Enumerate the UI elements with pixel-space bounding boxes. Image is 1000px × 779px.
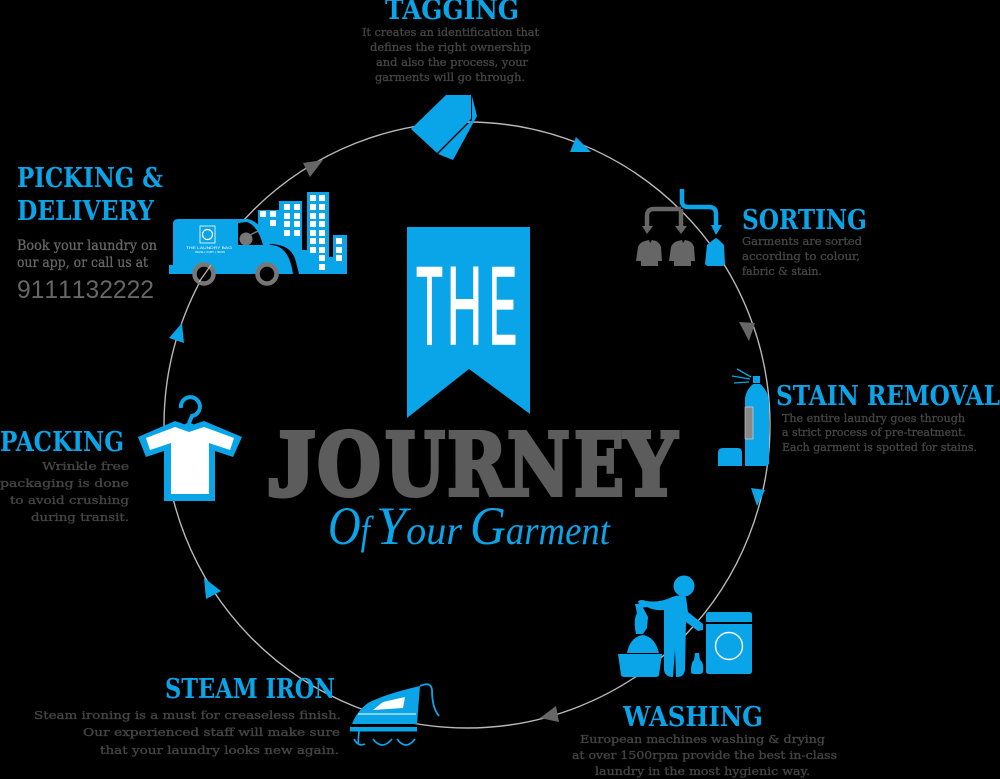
sorting text: fabric & stain. xyxy=(742,264,822,278)
title: JOURNEY: Y xyxy=(623,415,678,516)
title: JOURNEY: N xyxy=(507,415,570,516)
subtitle: Of Your Garment: Your xyxy=(376,496,462,556)
washing heading: WASHING xyxy=(622,702,763,733)
banner: THE xyxy=(407,227,530,418)
step: steam iron xyxy=(34,674,439,757)
washing text: at over 1500rpm provide the best in-class xyxy=(572,748,837,762)
title: JOURNEY: U xyxy=(385,415,445,516)
icon: person with laundry and washing machine xyxy=(618,576,752,677)
steam iron text: Our experienced staff will make sure xyxy=(83,725,340,739)
stain removal text: The entire laundry goes through xyxy=(782,411,966,425)
step: picking and delivery xyxy=(17,163,347,304)
subtitle: Of Your Garment: Of xyxy=(328,496,374,556)
sorting heading: SORTING xyxy=(742,205,867,236)
step: washing xyxy=(572,576,837,778)
picking and delivery heading: DELIVERY xyxy=(17,196,155,227)
stain removal text xyxy=(782,411,977,454)
title: JOURNEY: R xyxy=(447,415,507,516)
title: JOURNEY xyxy=(267,410,678,516)
washing text: European machines washing & drying xyxy=(580,732,826,746)
icon: city skyline xyxy=(258,192,347,274)
step: tagging xyxy=(362,0,539,160)
picking and delivery heading: PICKING & xyxy=(17,163,163,194)
arrows on the circle xyxy=(169,137,765,722)
tagging text: It creates an identification that xyxy=(362,25,539,39)
picking and delivery text xyxy=(17,238,157,271)
journey circle xyxy=(164,122,770,728)
icon: delivery van xyxy=(169,219,299,284)
van logo xyxy=(186,226,232,254)
packing text: Wrinkle free xyxy=(42,459,129,473)
steam iron text: that your laundry looks new again. xyxy=(100,743,339,757)
washing text xyxy=(572,732,837,778)
picking and delivery text: Book your laundry on xyxy=(17,238,157,254)
packing text: packaging is done xyxy=(0,476,129,490)
picking and delivery heading xyxy=(17,163,163,227)
tagging text: garments will go through. xyxy=(375,70,525,84)
phone number: 9111132222 xyxy=(17,276,154,304)
sorting text: Garments are sorted xyxy=(742,234,863,248)
subtitle: Of Your Garment: Garment xyxy=(470,496,611,556)
picking and delivery text: our app, or call us at xyxy=(17,255,148,271)
icon: sorting arrows and garments xyxy=(636,189,725,266)
banner: THE: H xyxy=(447,244,482,368)
stain removal text: Each garment is spotted for stains. xyxy=(782,440,977,454)
steam iron text: Steam ironing is a must for creaseless finish. xyxy=(34,708,341,722)
icon: spray bottle xyxy=(718,369,769,466)
subtitle: Of Your Garment xyxy=(328,496,611,556)
packing text: during transit. xyxy=(31,510,129,524)
icon: tag xyxy=(411,95,477,160)
packing text: to avoid crushing xyxy=(10,493,130,507)
title: JOURNEY: J xyxy=(267,410,315,516)
sorting text xyxy=(742,234,863,278)
banner: THE: E xyxy=(489,244,517,368)
tagging text: defines the right ownership xyxy=(370,40,531,54)
packing heading: PACKING xyxy=(0,427,124,458)
step: packing xyxy=(0,397,242,524)
title: JOURNEY: O xyxy=(317,415,381,516)
sorting text: according to colour, xyxy=(742,249,860,263)
step: sorting xyxy=(636,189,867,278)
icon: shirt on hanger xyxy=(138,397,242,501)
van logo: WASH | DRY | IRON xyxy=(195,250,225,254)
washing text: laundry in the most hygienic way. xyxy=(595,764,810,778)
tagging text xyxy=(362,25,539,84)
icon: steam iron xyxy=(350,684,439,745)
van logo: THE LAUNDRY BAG xyxy=(186,245,232,250)
banner: THE: T xyxy=(416,244,443,368)
stain removal text: a strict process of pre-treatment. xyxy=(782,425,966,439)
title: JOURNEY: E xyxy=(574,415,624,516)
steam iron heading: STEAM IRON xyxy=(165,674,335,705)
steam iron text xyxy=(34,708,341,757)
step: stain removal xyxy=(718,369,1000,466)
tagging text: and also the process, your xyxy=(376,55,528,69)
packing text xyxy=(0,459,130,524)
